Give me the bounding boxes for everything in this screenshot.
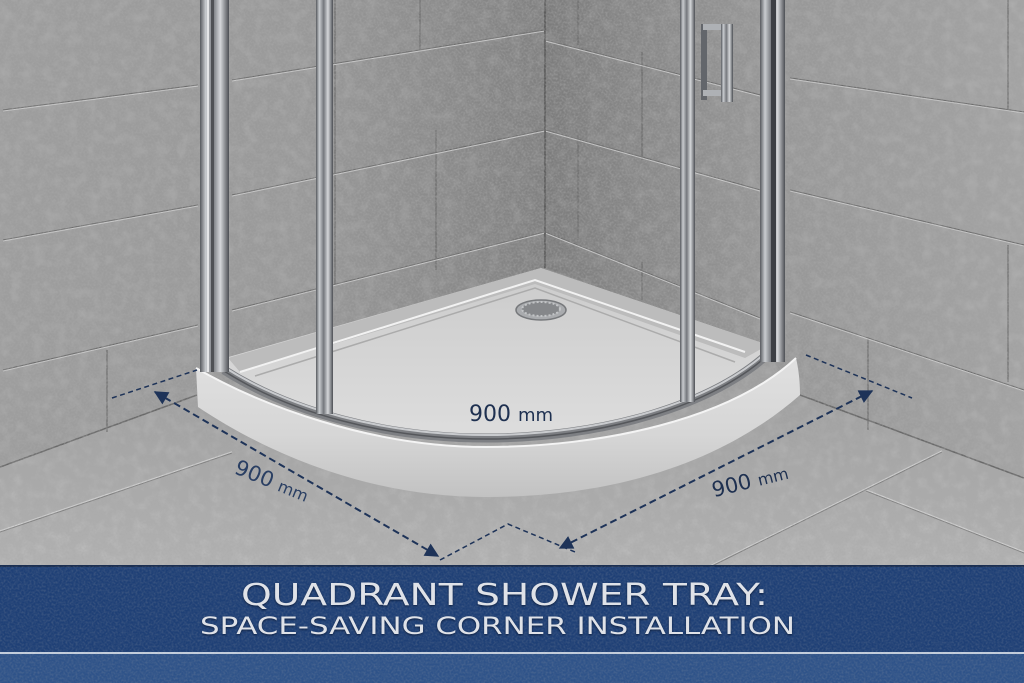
door handle	[701, 24, 733, 102]
left door frame	[200, 0, 229, 372]
middle-left glass door bar	[316, 0, 333, 414]
tray top surface	[225, 268, 768, 438]
left dimension arrow	[155, 392, 438, 556]
right door frame	[760, 0, 785, 362]
right dimension arrow	[560, 391, 872, 548]
floor	[0, 340, 1024, 570]
label: left 900 mm: 900 mm	[231, 455, 313, 507]
dimension lines	[112, 355, 912, 560]
subtitle: SPACE-SAVING CORNER INSTALLATION	[200, 612, 795, 640]
glass track	[224, 350, 772, 438]
tray front skirt	[196, 358, 800, 497]
back-right wall	[0, 0, 1024, 478]
middle-right glass door bar	[680, 0, 695, 402]
title banner	[0, 565, 1024, 683]
label: centre 900 mm: 900 mm	[469, 402, 553, 427]
drain	[516, 300, 566, 320]
label: right 900 mm: 900 mm	[709, 460, 791, 502]
main title: QUADRANT SHOWER TRAY:	[241, 578, 768, 613]
back-left wall	[0, 0, 545, 467]
extension guide lines	[112, 355, 912, 560]
shower tray	[196, 268, 800, 497]
